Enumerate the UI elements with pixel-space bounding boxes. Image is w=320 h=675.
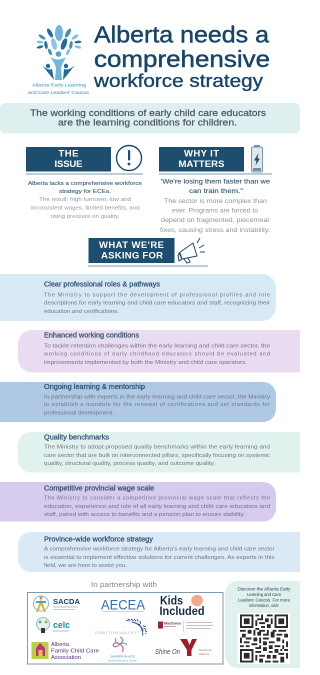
panel: competitive provincial wage scale: staff, paired with access to benefits and a pension plan to ensure stability. xyxy=(44,512,245,518)
logo: Shine On Northern Alberta: Shine On xyxy=(155,649,180,656)
logo: SACDA: SACDA xyxy=(53,599,80,606)
logo: AECEA: AECEA xyxy=(101,596,146,612)
text: why it matters quote and description xyxy=(160,178,271,234)
text: discover call to action: Learning and Care xyxy=(247,592,282,597)
panel: ongoing learning and mentorship: professional development. xyxy=(44,410,114,416)
logo: Alberta Early Learning and Care Leaders' Caucus xyxy=(28,25,90,95)
logo: Kids Included: Kids xyxy=(160,596,183,608)
panel: clear professional roles xyxy=(0,274,276,321)
icon: megaphone xyxy=(178,238,205,263)
panel: ongoing learning and mentorship: Ongoing learning & mentorship xyxy=(44,384,145,391)
text: issue description xyxy=(28,181,142,220)
logo: celc xyxy=(36,618,70,633)
panel: QR code call to action xyxy=(225,581,315,668)
text: issue description: rising pressure on quality. xyxy=(50,214,120,220)
heading: the issue: THE xyxy=(58,148,78,160)
text: discover call to action: Leaders' Caucus. For more xyxy=(238,598,291,602)
logo text xyxy=(28,82,90,95)
logo: Alberta Family Child Care Association xyxy=(32,642,99,661)
panel: province-wide workforce strategy: field, we are here to assist you. xyxy=(44,563,127,569)
panel: ongoing learning and mentorship: In partnership with experts in the early learning and child care sector, the Ministry xyxy=(44,394,270,400)
QR code xyxy=(238,613,290,664)
text: issue description: strategy for ECEs. xyxy=(59,189,112,195)
panel: competitive provincial wage scale xyxy=(0,482,276,522)
icon: battery xyxy=(252,145,262,172)
logo text: Alberta Early Learning xyxy=(32,82,86,88)
panel: quality benchmarks xyxy=(18,432,314,472)
panel: enhanced working conditions: Enhanced working conditions xyxy=(44,332,140,340)
text: discover call to action: Discover the Alberta Early xyxy=(238,586,292,592)
logo: Alberta Family Child Care Association: Alberta xyxy=(51,642,70,648)
icon: exclamation mark xyxy=(116,146,142,170)
panel: quality benchmarks: Quality benchmarks xyxy=(44,434,110,442)
title: comprehensive xyxy=(94,46,270,72)
logo: Alberta Family Child Care Association: Association xyxy=(51,655,81,661)
panel: enhanced working conditions: improvements implemented by both the Ministry and child care operators. xyxy=(44,360,247,366)
text: why it matters quote and description: 'We're losing them faster than we xyxy=(161,178,271,186)
subtitle banner xyxy=(0,103,300,134)
panel: province-wide workforce strategy: is essential to implement effective solutions for current challenges. As experts in this xyxy=(44,555,275,561)
heading: in partnership with: In partnership with xyxy=(91,580,157,589)
panel: ongoing learning and mentorship xyxy=(0,382,276,422)
panel: enhanced working conditions: To tackle retention challenges within the early learning and child care sector, the xyxy=(44,344,270,350)
heading: what we're asking for xyxy=(88,238,208,266)
text: why it matters quote and description: fixes, causing stress and instability. xyxy=(160,227,270,234)
logo: Alberta Family Child Care Association: Family Child Care xyxy=(51,648,99,654)
panel: why it matters xyxy=(159,145,272,234)
panel: enhanced working conditions xyxy=(18,330,314,372)
logo: Drayton Valley xyxy=(95,619,147,636)
logo: SACDA xyxy=(34,596,80,612)
text: discover call to action: information, visit: xyxy=(249,603,279,608)
panel: the issue xyxy=(26,146,143,220)
heading: what we're asking for: ASKING FOR xyxy=(101,250,163,262)
logo: Kids Included: Included xyxy=(160,606,204,618)
panel: quality benchmarks: care sector that are built on interconnected pillars, specifically focusing on systemic xyxy=(44,453,270,459)
heading: the issue: ISSUE xyxy=(54,159,82,170)
subtitle banner: are the learning conditions for children. xyxy=(58,118,237,128)
heading: why it matters xyxy=(159,147,244,172)
panel: enhanced working conditions: working conditions of early childhood educators should be evaluated and xyxy=(43,352,270,358)
logo: Shine On Northern Alberta xyxy=(155,639,212,656)
panel: province-wide workforce strategy xyxy=(18,532,314,572)
text: why it matters quote and description: depend on fragmented, piecemeal xyxy=(161,217,269,224)
heading: the issue xyxy=(26,147,111,172)
logo: celc: celc xyxy=(53,620,70,630)
text: issue description: inconsistent wages, limited benefits, and xyxy=(30,206,140,212)
text: issue description: The result: high turnover, low and xyxy=(39,197,131,203)
logo: Kids Included xyxy=(160,595,204,618)
logo: Shine On Northern Alberta: Alberta xyxy=(199,652,209,656)
text: why it matters quote and description: ever. Programs are forced to xyxy=(172,208,259,214)
panel: clear professional roles: The Ministry to support the development of professional profiles and role xyxy=(44,292,270,298)
panel: province-wide workforce strategy: Province-wide workforce strategy xyxy=(44,536,154,544)
text: why it matters quote and description: can train them." xyxy=(189,188,243,195)
logo text: and Care Leaders' Caucus xyxy=(28,90,90,95)
logo: MacEwan xyxy=(158,621,213,632)
panel: province-wide workforce strategy: A comprehensive workforce strategy for Alberta's early learning and child care sector xyxy=(44,546,275,552)
title: workforce strategy xyxy=(93,71,263,91)
icon: tree with people xyxy=(36,25,82,80)
text: discover call to action xyxy=(238,586,292,608)
title: Alberta needs a xyxy=(94,22,270,48)
panel: ongoing learning and mentorship: to establish a mandate for the renewal of certifications and set standards for xyxy=(44,402,270,408)
heading: why it matters: WHY IT xyxy=(184,148,219,160)
heading: what we're asking for: WHAT WE'RE xyxy=(99,240,164,251)
text: why it matters quote and description: The sector is more complex than xyxy=(164,198,268,205)
panel: quality benchmarks: quality, structural quality, process quality, and outcome quality. xyxy=(44,461,215,467)
text: issue description: Alberta lacks a comprehensive workforce xyxy=(28,181,142,187)
panel: competitive provincial wage scale: education, experience and role of all early learning and child care educators and xyxy=(44,504,270,510)
panel: competitive provincial wage scale: The Ministry to consider a competitive provincial wage scale that reflects the xyxy=(44,496,270,502)
panel: clear professional roles: Clear professional roles & pathways xyxy=(44,282,161,288)
logo: Jasper Place xyxy=(108,637,137,662)
panel: clear professional roles: education and certifications. xyxy=(44,309,119,315)
panel: clear professional roles: descriptions for early learning and child care educators and staff, recognizing their xyxy=(44,300,270,306)
heading: why it matters: MATTERS xyxy=(178,159,224,170)
panel: partner logos xyxy=(28,592,223,664)
panel: competitive provincial wage scale: Competitive provincial wage scale xyxy=(44,486,154,492)
panel: quality benchmarks: The Ministry to adopt proposed quality benchmarks within the early learning and xyxy=(44,444,270,450)
logo: MacEwan: MacEwan xyxy=(164,622,181,626)
logo: Drayton Valley: DRAYTON VALLEY xyxy=(95,630,137,635)
logo: Jasper Place: Family Resource Centre xyxy=(108,658,137,662)
logo: Shine On Northern Alberta: Northern xyxy=(199,648,212,652)
title xyxy=(93,22,270,91)
logo: Jasper Place: JASPER PLACE xyxy=(110,654,135,658)
subtitle banner: The working conditions of early child care educators xyxy=(30,108,267,118)
